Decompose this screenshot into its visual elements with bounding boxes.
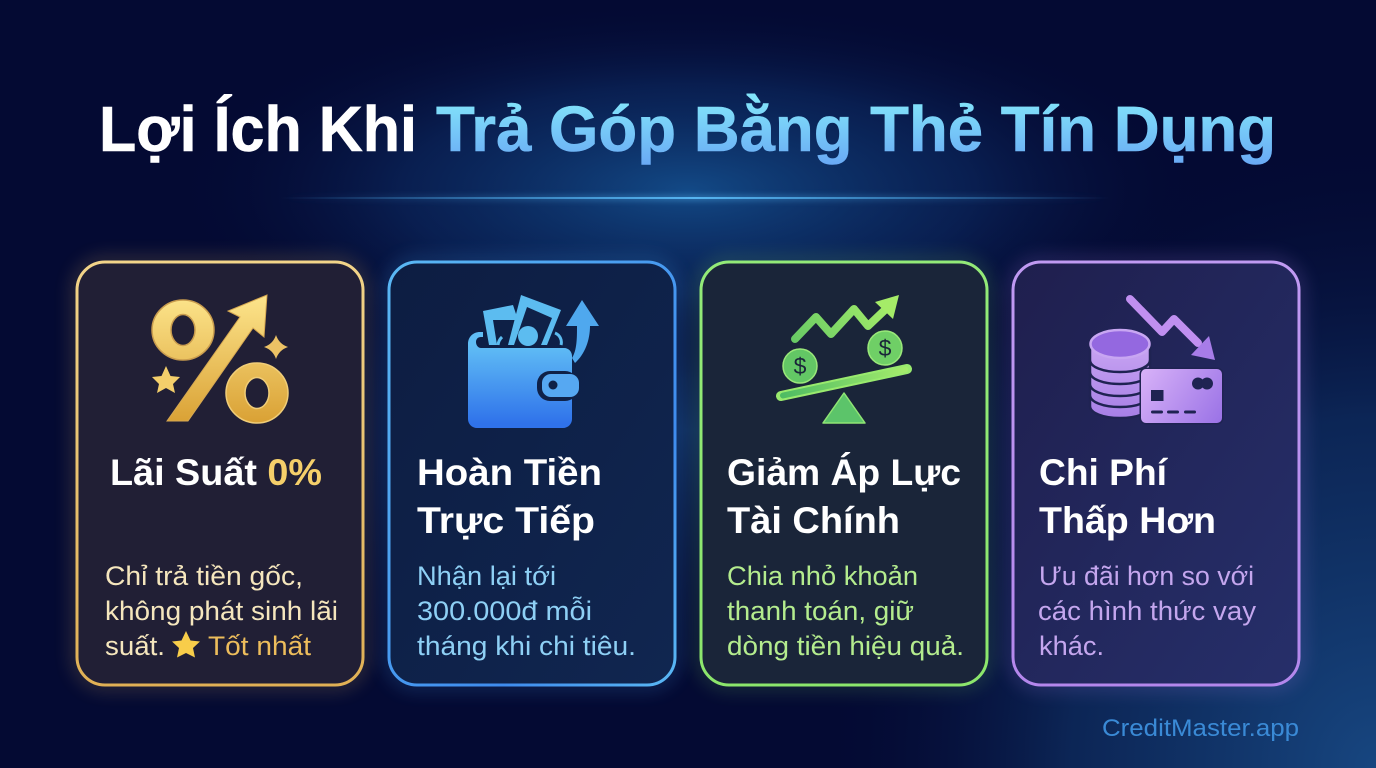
title: Trả Góp Bằng Thẻ Tín Dụng [436,93,1276,165]
card description: Nhận lại tới [417,561,556,591]
card description: 300.000đ mỗi [417,596,592,626]
card description [417,561,636,661]
title: Lợi Ích Khi [99,93,417,165]
card description: dòng tiền hiệu quả. [727,631,964,661]
card description: Tốt nhất [208,631,312,661]
card description: thanh toán, giữ [727,596,914,626]
card heading: Trực Tiếp [417,500,595,541]
icon: balance with rising chart [781,295,907,423]
card description: Chia nhỏ khoản [727,561,918,591]
card heading: Giảm Áp Lực [727,452,961,493]
icon: coins, card and falling arrow [1090,299,1222,423]
panel: lãi suất 0% [77,262,363,685]
panel: giảm áp lực tài chính [701,262,987,685]
card heading: Tài Chính [727,500,900,541]
card description: Chỉ trả tiền gốc, [105,561,303,591]
card heading: Lãi Suất 0% [110,452,322,493]
card heading: Thấp Hơn [1039,500,1216,541]
footer brand: CreditMaster.app [1102,715,1299,742]
card description: khác. [1039,631,1104,661]
card heading: Hoàn Tiền [417,452,602,493]
card heading [1039,452,1216,541]
card description: các hình thức vay [1038,596,1257,626]
icon: balance with rising chart: $ [879,335,892,361]
card description [727,561,964,661]
card heading [727,452,961,541]
icon: balance with rising chart: $ [794,353,807,379]
card description: không phát sinh lãi [105,596,338,626]
card description [1038,561,1257,661]
icon: percent with rising arrow [152,295,288,423]
panel: chi phí thấp hơn [1013,262,1299,685]
card heading [417,452,602,541]
title divider [280,195,1110,201]
card heading: Chi Phí [1039,452,1169,493]
panel: hoàn tiền trực tiếp [389,262,675,685]
card description: tháng khi chi tiêu. [417,631,636,661]
icon: wallet with cash [468,295,599,428]
card description: suất. [105,631,165,661]
card description [105,561,338,661]
card description: Ưu đãi hơn so với [1039,561,1254,591]
